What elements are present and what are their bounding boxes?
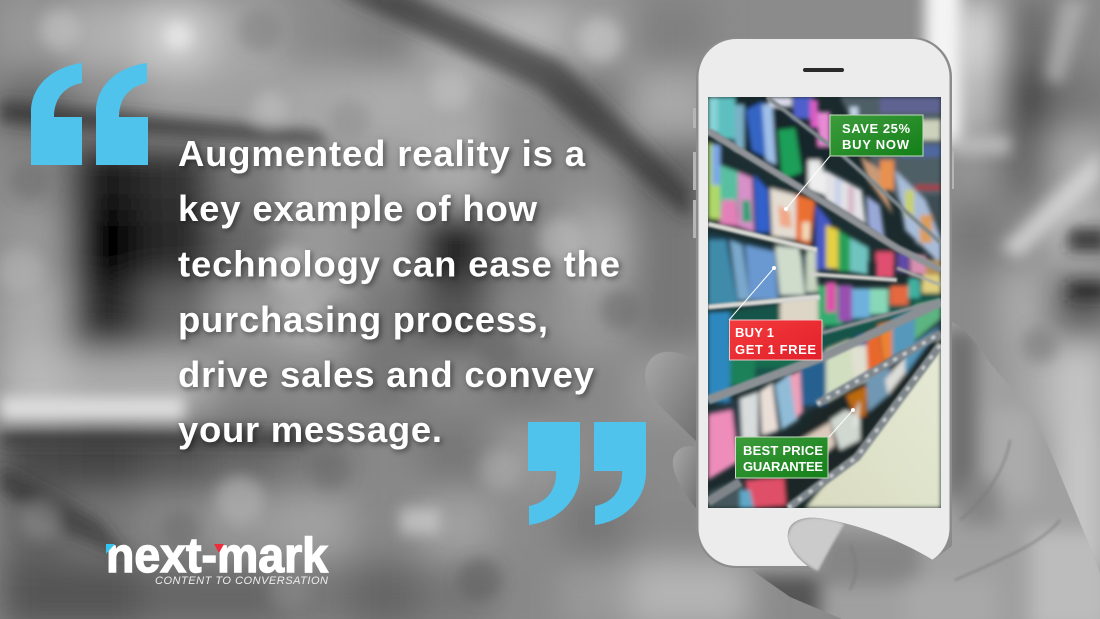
quote text <box>178 133 620 450</box>
hand: palm and thumb <box>740 310 1100 619</box>
quote text: Augmented reality is a <box>178 133 586 174</box>
company logo: CONTENT TO CONVERSATION <box>155 575 328 587</box>
callout: buy 1 get 1 free: GET 1 FREE <box>735 342 816 357</box>
phone side buttons <box>693 108 954 238</box>
fourth shelf row <box>714 282 941 388</box>
upper aisle run <box>860 155 893 215</box>
mid-frequency shelf mottling <box>40 10 80 50</box>
quote text: purchasing process, <box>178 299 548 340</box>
quote mark: opening <box>31 63 148 165</box>
callout: best price guarantee: GUARANTEE <box>743 459 823 474</box>
callout: save 25%: BUY NOW <box>842 137 910 152</box>
shelf edges <box>767 97 941 243</box>
phone rim <box>696 37 952 568</box>
quote text: key example of how <box>178 188 538 229</box>
callout: buy 1 get 1 free <box>730 320 822 360</box>
quote text: technology can ease the <box>178 244 620 284</box>
third shelf row <box>708 232 816 307</box>
quote text: drive sales and convey <box>178 354 595 395</box>
fifth shelf row <box>708 318 941 457</box>
quote mark: closing <box>528 422 646 525</box>
callout: save 25% <box>830 115 923 156</box>
phone screen: store aisle photo <box>708 97 941 508</box>
company logo: next-mark <box>106 529 329 583</box>
top shelf row <box>726 97 830 193</box>
sixth shelf row <box>755 338 941 508</box>
phone face <box>698 39 950 566</box>
callout: best price guarantee: BEST PRICE <box>743 443 823 458</box>
phone speaker <box>803 68 844 72</box>
second shelf row <box>708 135 895 265</box>
thumb nail <box>787 518 844 571</box>
callout: save 25%: SAVE 25% <box>842 121 910 136</box>
hand creases <box>850 440 1060 590</box>
callout: best price guarantee <box>736 437 828 478</box>
callout pointer lines <box>729 156 855 437</box>
smartphone <box>693 37 954 568</box>
hand: back fingers <box>645 352 699 512</box>
right side <box>925 0 961 145</box>
ceiling and far aisle <box>839 97 941 203</box>
callout: buy 1 get 1 free: BUY 1 <box>735 325 774 340</box>
quote text: your message. <box>178 409 442 450</box>
floor <box>805 333 941 508</box>
